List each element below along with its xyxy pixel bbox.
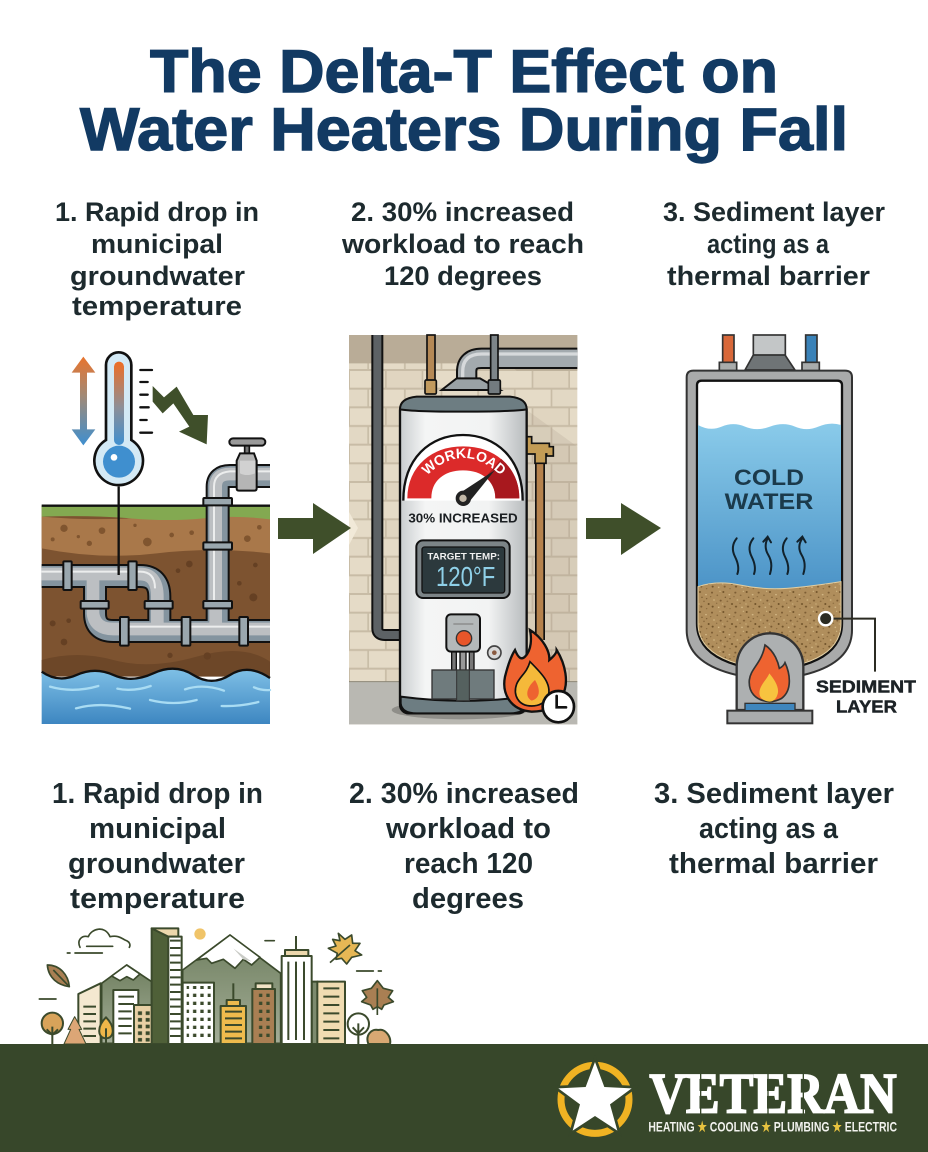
mountains xyxy=(102,935,281,1043)
text: step 2 caption: workload to xyxy=(385,813,551,845)
burner housing xyxy=(727,633,812,723)
cold water xyxy=(698,424,841,593)
heat rising arrows xyxy=(733,537,806,574)
icon: up and down arrow xyxy=(72,357,95,445)
soil layers xyxy=(42,506,270,677)
callout: sediment layer: LAYER xyxy=(836,697,897,717)
city skyline illustration xyxy=(39,928,393,1044)
burner control valve xyxy=(432,614,501,701)
heading: step 1: groundwater xyxy=(70,261,246,291)
workload gauge: WORKLOAD xyxy=(420,448,505,474)
text: step 1 caption: groundwater xyxy=(68,848,245,880)
text: step 2 caption: reach 120 xyxy=(404,848,533,880)
heading: step 1: temperature xyxy=(72,291,242,321)
label: cold water: COLD xyxy=(734,465,804,490)
heading: step 3: thermal barrier xyxy=(667,261,871,291)
heading: step 1: municipal xyxy=(91,229,223,259)
heading: step 1: 1. Rapid drop in xyxy=(55,197,259,227)
sun xyxy=(194,928,206,940)
text: step 1 caption: 1. Rapid drop in xyxy=(52,778,263,810)
heading: step 2: 120 degrees xyxy=(384,261,542,291)
text: step 2 caption xyxy=(349,778,579,915)
top connections xyxy=(719,335,819,371)
workload gauge: 30% INCREASED xyxy=(408,512,518,526)
title xyxy=(80,38,848,163)
heading: step 3: acting as a xyxy=(707,229,830,259)
buildings xyxy=(78,928,345,1044)
footer band xyxy=(0,1044,928,1152)
temperature display: TARGET TEMP: xyxy=(427,551,500,561)
icon: thermometer xyxy=(94,352,143,575)
tank interior xyxy=(697,381,842,665)
pipe clamps xyxy=(63,498,248,646)
panel: groundwater illustration xyxy=(42,352,270,724)
heading: step 2: workload to reach xyxy=(341,229,584,259)
callout: sediment layer: SEDIMENT xyxy=(816,677,916,697)
trees xyxy=(42,1013,390,1044)
heater tank body xyxy=(400,397,527,713)
text: step 2 caption: 2. 30% increased xyxy=(349,778,579,810)
supply pipes xyxy=(377,335,577,640)
icon: flame xyxy=(504,630,566,712)
text: step 1 caption xyxy=(52,778,263,915)
brick wall and floor xyxy=(349,335,577,724)
text: step 2 caption: degrees xyxy=(412,883,524,915)
temperature display xyxy=(416,540,510,598)
cloud and wind dashes xyxy=(39,929,381,999)
panel: water heater illustration xyxy=(349,334,578,724)
temperature display: 120°F xyxy=(436,561,495,592)
arrow: step 1 to step 2 xyxy=(278,503,358,554)
text: step 3 caption: acting as a xyxy=(699,813,839,845)
icon: star in ring xyxy=(558,1062,632,1133)
window bars xyxy=(83,941,339,1038)
text: step 1 caption: temperature xyxy=(70,883,245,915)
heading: step 1 xyxy=(55,197,259,321)
buried pipework xyxy=(42,471,270,631)
callout: sediment layer xyxy=(816,612,916,717)
arrow: step 2 to step 3 xyxy=(586,503,661,555)
title: The Delta-T Effect on xyxy=(150,38,778,105)
heading: step 2: 2. 30% increased xyxy=(351,197,574,227)
icon: clock xyxy=(543,691,574,722)
label: cold water: WATER xyxy=(725,489,813,514)
thermometer ticks xyxy=(140,370,152,433)
panel: tank cross-section illustration xyxy=(687,335,916,723)
heading: step 2 xyxy=(341,197,584,291)
logo: Veteran xyxy=(558,1062,897,1135)
workload gauge xyxy=(402,434,524,526)
text: step 3 caption: 3. Sediment layer xyxy=(654,778,894,810)
icon: burner flame xyxy=(749,645,789,702)
text: step 1 caption: municipal xyxy=(89,813,226,845)
sediment layer xyxy=(698,582,841,663)
heading: step 3: 3. Sediment layer xyxy=(663,197,885,227)
autumn leaves xyxy=(47,933,393,1015)
water table xyxy=(42,669,270,724)
text: step 3 caption xyxy=(654,778,894,880)
label: cold water xyxy=(725,465,813,514)
wordmark: VETERAN xyxy=(649,1063,897,1126)
icon: faucet xyxy=(229,438,265,491)
title: Water Heaters During Fall xyxy=(80,96,848,163)
icon: falling zigzag arrow xyxy=(153,386,208,444)
tank shell xyxy=(687,371,852,675)
text: step 3 caption: thermal barrier xyxy=(669,848,878,880)
heading: step 3 xyxy=(663,197,885,291)
tagline: HEATING ★ COOLING ★ PLUMBING ★ ELECTRIC xyxy=(648,1119,897,1135)
